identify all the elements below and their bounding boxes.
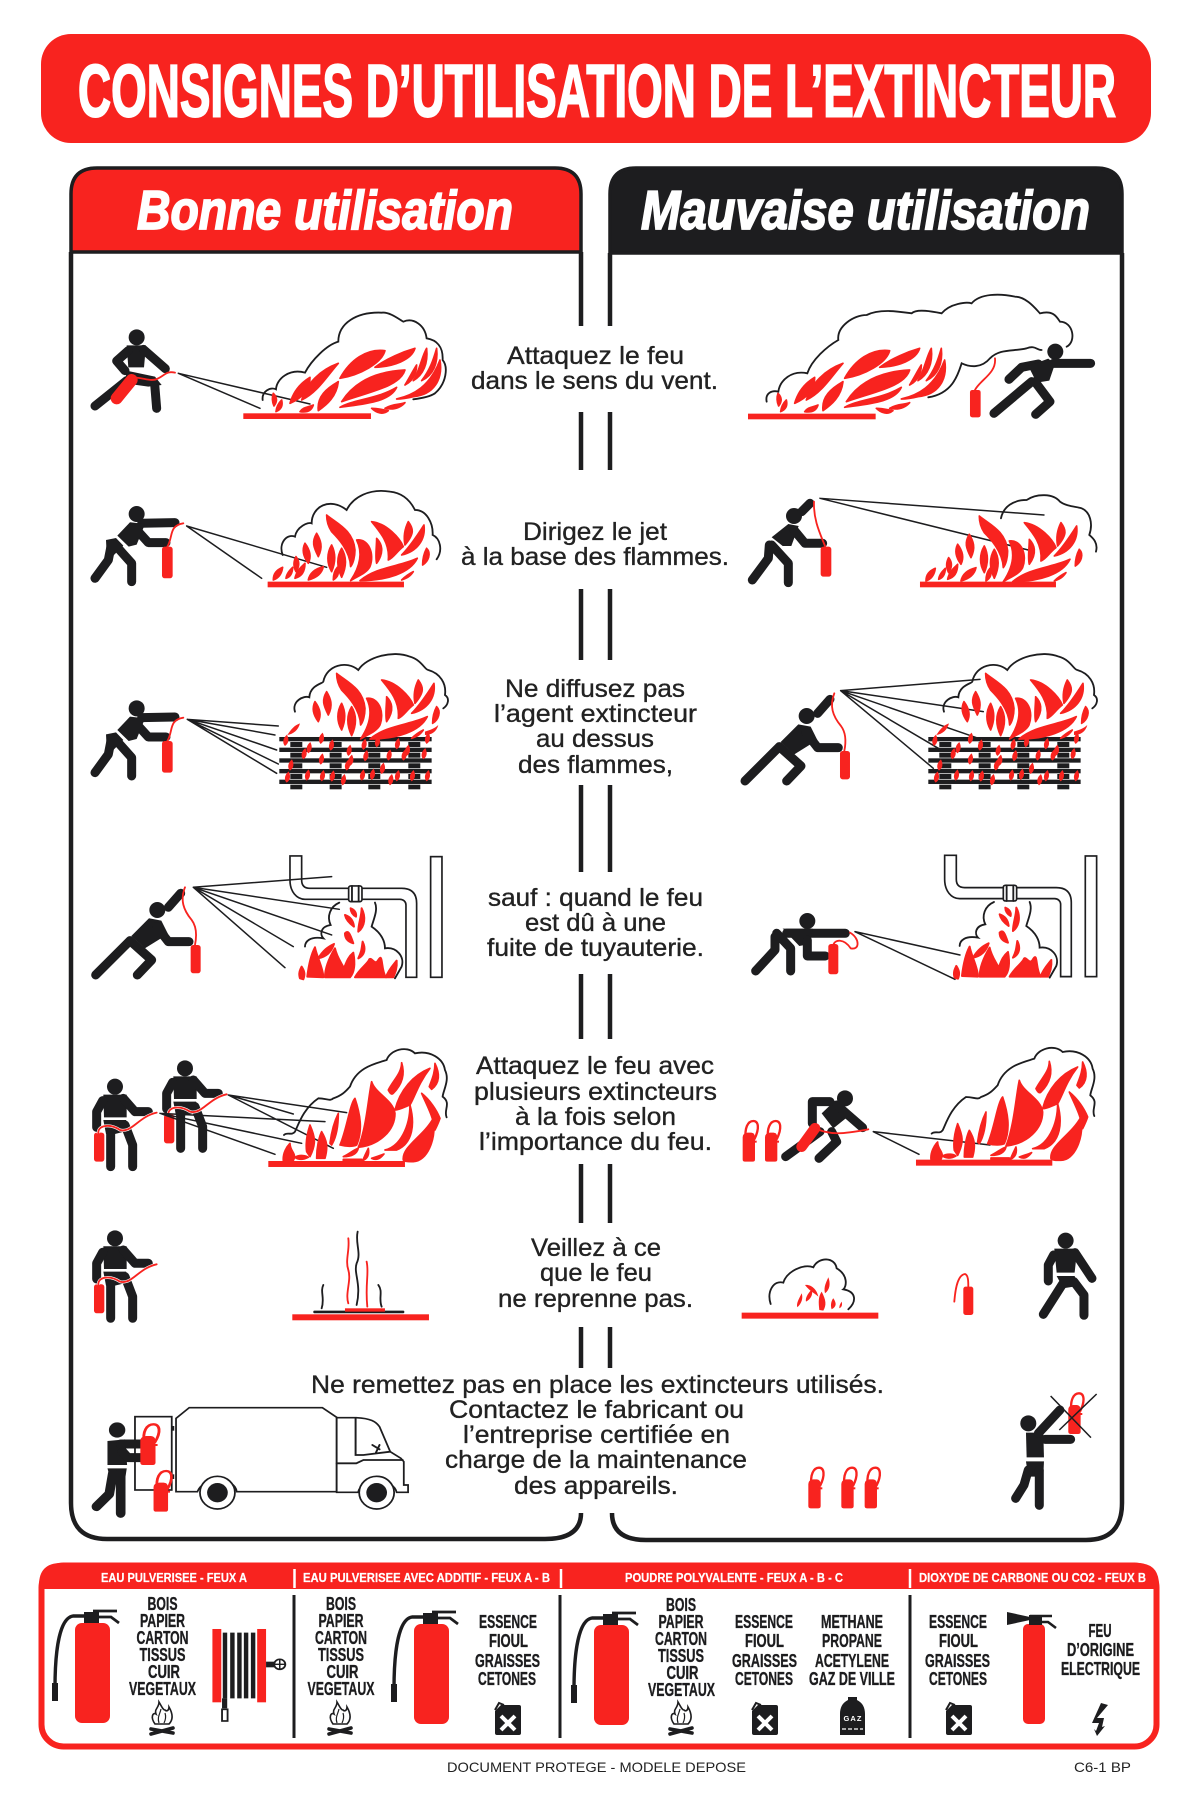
instruction text: ne diffusez pas: l’agent extincteur: [494, 700, 697, 728]
row 2 good: jet at the base of flames: [95, 491, 440, 587]
row 6 bad: walking away from a still-burning fire: [742, 1233, 1092, 1319]
footer note: DOCUMENT PROTEGE - MODELE DEPOSE: [447, 1759, 746, 1775]
legend column: poudre polyvalente: ESSENCE: [735, 1611, 793, 1632]
heading: bonne utilisation: Bonne utilisation: [137, 179, 513, 241]
legend column: dioxyde de carbone: CETONES: [929, 1668, 987, 1689]
legend column: poudre polyvalente: PAPIER: [658, 1611, 704, 1632]
instruction text: base des flammes: à la base des flammes.: [461, 543, 729, 571]
instruction text: sens du vent: [471, 342, 718, 395]
legend column: poudre polyvalente: [571, 1594, 895, 1735]
legend column: eau pulverisee: TISSUS: [140, 1644, 186, 1665]
legend column: eau pulverisee avec additif: GRAISSES: [475, 1650, 540, 1671]
legend column: eau pulverisee avec additif: FIOUL: [489, 1630, 528, 1651]
panel: extinguisher types legend: [39, 1563, 1159, 1746]
legend column: eau pulverisee: VEGETAUX: [129, 1678, 196, 1699]
legend column: poudre polyvalente: VEGETAUX: [648, 1679, 715, 1700]
legend column: eau pulverisee avec additif: VEGETAUX: [308, 1678, 375, 1699]
legend column: dioxyde de carbone: FEU: [1088, 1620, 1112, 1641]
instruction text: ne remettez pas en place: [311, 1371, 884, 1500]
legend column: dioxyde de carbone: [925, 1611, 1140, 1736]
row 7 good: returning used extinguishers to the truck: [96, 1408, 408, 1513]
instruction text: plusieurs extincteurs: plusieurs extincteurs: [474, 1078, 717, 1106]
legend column: poudre polyvalente: METHANE: [821, 1611, 883, 1632]
legend column: eau pulverisee avec additif: BOIS: [326, 1593, 356, 1614]
instruction text: ne diffusez pas: Ne diffusez pas: [505, 675, 685, 703]
instruction text: veillez: que le feu: [540, 1259, 652, 1287]
row 4 good: spray above for pipe leak: [96, 856, 442, 979]
instruction text: fuite de tuyauterie: sauf : quand le feu: [488, 884, 703, 912]
row 1 good: attack with the wind: [95, 313, 446, 419]
legend header labels: EAU PULVERISEE - FEUX A: [101, 1571, 247, 1585]
row 5 good: two people with extinguishers: [94, 1049, 447, 1167]
legend column: dioxyde de carbone: GRAISSES: [925, 1650, 990, 1671]
instruction text: plusieurs extincteurs: l’importance du feu.: [479, 1128, 712, 1156]
instruction text: ne remettez pas en place: des appareils.: [514, 1472, 678, 1500]
instruction text: veillez: [498, 1234, 693, 1313]
legend column: eau pulverisee avec additif: [308, 1593, 540, 1735]
legend column: eau pulverisee avec additif: CUIR: [326, 1661, 358, 1682]
row 4 bad: aiming at the base of a pipe leak: [756, 855, 1097, 979]
heading: mauvaise utilisation: Mauvaise utilisation: [641, 179, 1090, 241]
icon: hose reel: [212, 1629, 285, 1721]
row 5 bad: alone in a large fire: [743, 1048, 1095, 1166]
legend header labels: EAU PULVERISEE AVEC ADDITIF - FEUX A - B: [303, 1571, 550, 1585]
instruction text: ne remettez pas en place: charge de la maintenance: [445, 1446, 747, 1474]
icon: CO2 extinguisher: [1007, 1612, 1056, 1724]
legend column: eau pulverisee avec additif: PAPIER: [318, 1610, 364, 1631]
legend column: poudre polyvalente: CETONES: [735, 1668, 793, 1689]
icon: gas bottle: GAZ: [844, 1714, 862, 1723]
row 3 good: jet at the burning pallet: [95, 654, 448, 789]
row 6 good: watching over the extinguished fire: [94, 1230, 429, 1320]
legend column: eau pulverisee: CARTON: [136, 1627, 188, 1648]
legend column: eau pulverisee avec additif: ESSENCE: [479, 1611, 537, 1632]
instruction text: veillez: ne reprenne pas.: [498, 1285, 693, 1313]
legend column: eau pulverisee avec additif: TISSUS: [318, 1644, 364, 1665]
instruction text: ne remettez pas en place: Ne remettez pas en place les extincteurs utilisés.: [311, 1371, 884, 1399]
legend column: dioxyde de carbone: ESSENCE: [929, 1611, 987, 1632]
row 7 bad: rehanging used extinguishers: [808, 1393, 1097, 1508]
instruction text: plusieurs extincteurs: Attaquez le feu avec: [476, 1052, 714, 1080]
instruction text: ne diffusez pas: au dessus: [536, 725, 654, 753]
legend column: eau pulverisee: CUIR: [148, 1661, 180, 1682]
legend column: dioxyde de carbone: ELECTRIQUE: [1061, 1658, 1140, 1679]
instruction text: ne diffusez pas: des flammes,: [518, 751, 673, 779]
legend column: poudre polyvalente: TISSUS: [658, 1645, 704, 1666]
legend header labels: [101, 1571, 1146, 1585]
truck: [135, 1408, 408, 1509]
panel: bonne utilisation: [71, 168, 581, 1539]
heading: bonne utilisation: [71, 168, 581, 252]
legend column: eau pulverisee: BOIS: [148, 1593, 178, 1614]
legend column: poudre polyvalente: FIOUL: [745, 1630, 784, 1651]
legend column: poudre polyvalente: BOIS: [666, 1594, 696, 1615]
legend column: poudre polyvalente: PROPANE: [822, 1630, 882, 1651]
icon: lightning: [1092, 1703, 1108, 1736]
legend column: dioxyde de carbone: FIOUL: [939, 1630, 978, 1651]
instruction text: veillez: Veillez à ce: [531, 1234, 661, 1262]
legend column: poudre polyvalente: GAZ DE VILLE: [809, 1668, 895, 1689]
legend header labels: DIOXYDE DE CARBONE OU CO2 - FEUX B: [919, 1571, 1146, 1585]
instruction text: fuite de tuyauterie: [487, 884, 704, 962]
panel: mauvaise utilisation: [610, 168, 1122, 1540]
instruction text: sens du vent: Attaquez le feu: [507, 342, 684, 370]
instruction text: sens du vent: dans le sens du vent.: [471, 367, 718, 395]
legend column: poudre polyvalente: CARTON: [655, 1628, 707, 1649]
instruction text: base des flammes: Dirigez le jet: [523, 518, 667, 546]
legend column: poudre polyvalente: ACETYLENE: [815, 1650, 889, 1671]
legend column: dioxyde de carbone: D’ORIGINE: [1067, 1639, 1134, 1660]
legend column: poudre polyvalente: GRAISSES: [732, 1650, 797, 1671]
icon: gas bottle: [840, 1697, 865, 1735]
row 1 bad: against the wind: [748, 295, 1091, 419]
instruction text: base des flammes: [461, 518, 729, 571]
row 2 bad: jet too high: [752, 495, 1097, 587]
instruction text: plusieurs extincteurs: à la fois selon: [515, 1103, 676, 1131]
legend column: poudre polyvalente: CUIR: [666, 1662, 698, 1683]
heading: mauvaise utilisation: [610, 168, 1122, 253]
legend column: eau pulverisee: PAPIER: [140, 1610, 185, 1631]
instruction text: fuite de tuyauterie: est dû à une: [525, 909, 666, 937]
instruction text: plusieurs extincteurs: [474, 1052, 717, 1156]
legend column: eau pulverisee avec additif: CARTON: [315, 1627, 367, 1648]
instruction text: ne remettez pas en place: l’entreprise certifiée en: [463, 1421, 730, 1449]
person loading: [96, 1422, 145, 1513]
row 3 bad: jet above the flames: [745, 654, 1097, 789]
legend column: eau pulverisee: [52, 1593, 285, 1734]
reference code: C6-1 BP: [1074, 1759, 1131, 1775]
instruction text: ne diffusez pas: [494, 675, 697, 779]
legend header labels: POUDRE POLYVALENTE - FEUX A - B - C: [625, 1571, 843, 1585]
legend column: eau pulverisee avec additif: CETONES: [478, 1668, 536, 1689]
instruction text: fuite de tuyauterie: fuite de tuyauterie.: [487, 934, 704, 962]
instruction text: ne remettez pas en place: Contactez le fabricant ou: [449, 1396, 744, 1424]
